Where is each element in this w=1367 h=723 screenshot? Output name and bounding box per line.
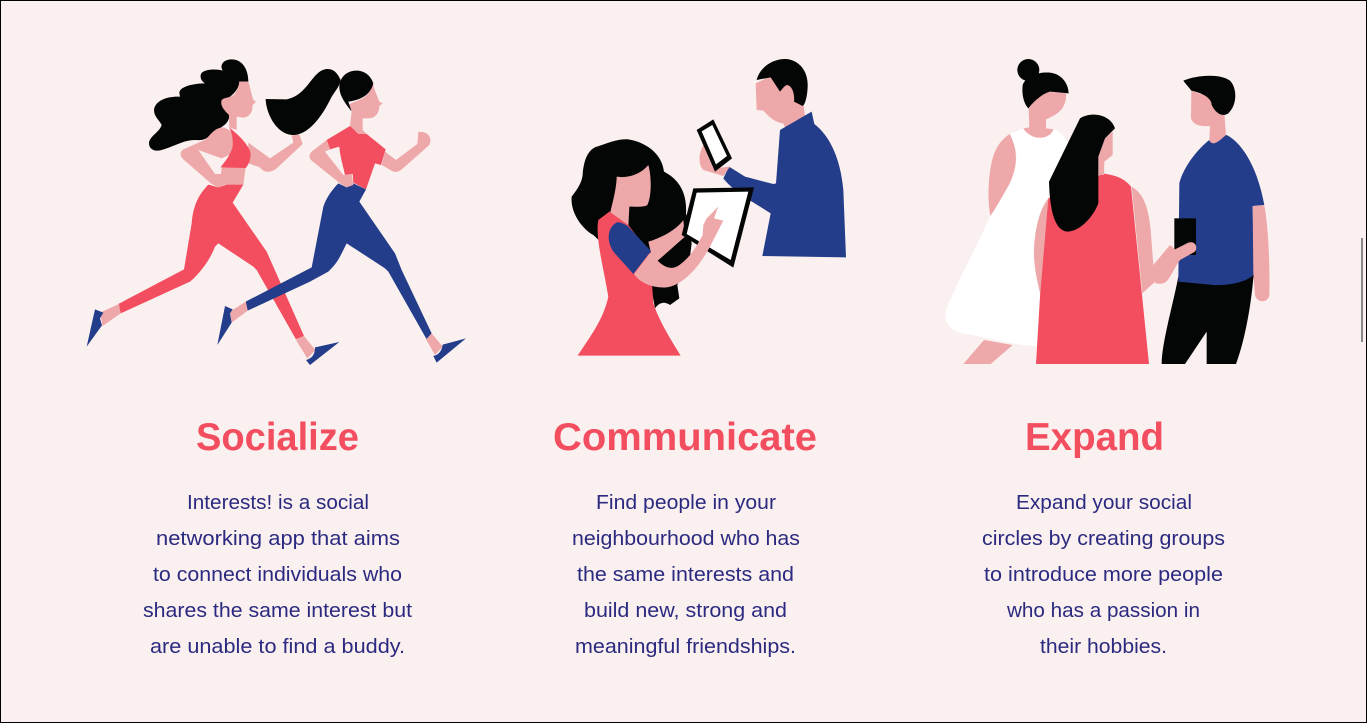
- text block: Expand description: [982, 492, 1225, 658]
- text block: Socialize description: are unable to find a buddy.: [150, 636, 405, 658]
- text block: Socialize description: shares the same interest but: [143, 600, 412, 622]
- text block: Communicate description: Find people in your: [596, 492, 776, 514]
- illustration: three people talking: [946, 59, 1269, 364]
- text block: Expand description: circles by creating groups: [982, 528, 1225, 550]
- woman in red dress with phone: [1034, 115, 1196, 364]
- illustration: two women running: [87, 59, 466, 365]
- text block: Expand description: their hobbies.: [1040, 636, 1167, 658]
- illustration: woman with tablet and man with phone: [572, 59, 846, 356]
- heading: Socialize: Socialize: [196, 416, 359, 459]
- text block: Socialize description: networking app that aims: [156, 528, 400, 550]
- man with phone: [697, 59, 846, 257]
- text block: Expand description: to introduce more people: [984, 564, 1223, 586]
- man in blue shirt: [1162, 76, 1269, 364]
- text block: Communicate description: the same interests and: [577, 564, 794, 586]
- text block: Socialize description: [143, 492, 412, 658]
- heading: Expand: Expand: [1025, 416, 1164, 459]
- right runner: [217, 69, 466, 363]
- text block: Communicate description: neighbourhood who has: [572, 528, 800, 550]
- text block: Communicate description: [572, 492, 800, 658]
- text block: Expand description: Expand your social: [1016, 492, 1192, 514]
- woman in white dress: [946, 59, 1069, 364]
- text block: Communicate description: build new, strong and: [584, 600, 787, 622]
- text block: Socialize description: Interests! is a social: [187, 492, 369, 514]
- left runner: [87, 59, 339, 365]
- text block: Communicate description: meaningful friendships.: [575, 636, 796, 658]
- heading: Communicate: Communicate: [553, 416, 817, 459]
- text block: Socialize description: to connect individuals who: [153, 564, 402, 586]
- text block: Expand description: who has a passion in: [1006, 600, 1200, 622]
- woman with tablet: [572, 139, 754, 356]
